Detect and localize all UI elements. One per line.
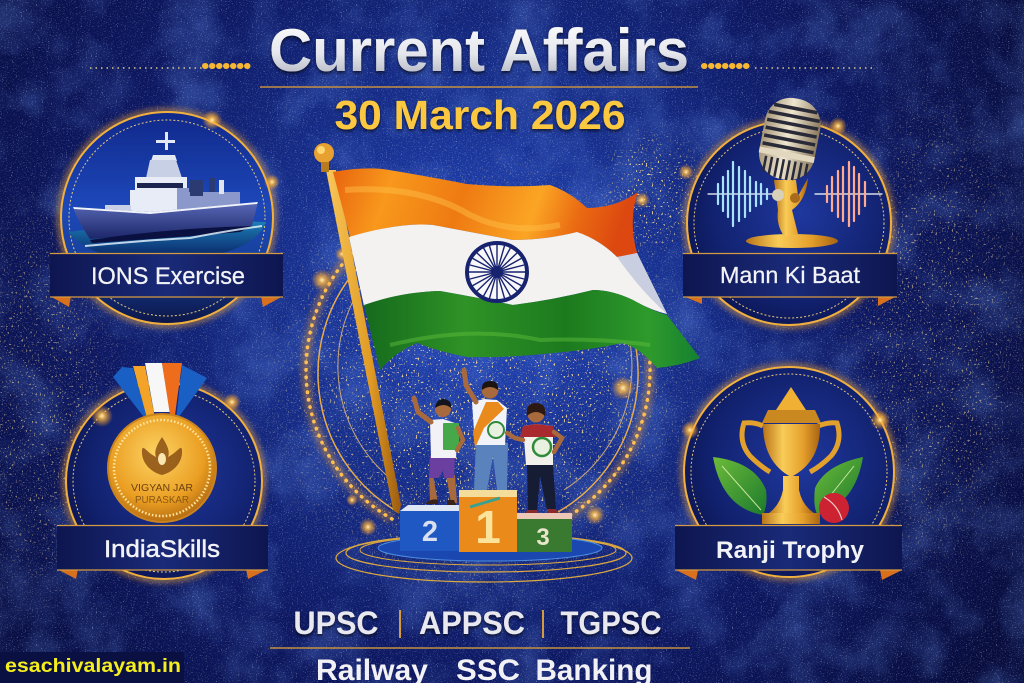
figure right	[507, 403, 562, 516]
date: 30 March 2026	[334, 92, 626, 138]
panel: Mann Ki Baat	[683, 93, 897, 326]
figure centre	[464, 370, 508, 490]
platform rings	[336, 534, 632, 582]
step 1	[459, 490, 517, 553]
ring	[686, 120, 892, 326]
icon: medal: VIGYAN JAR	[131, 482, 193, 494]
step 2: 2	[422, 516, 438, 548]
banner: IndiaSkills	[104, 536, 220, 563]
banner: IONS Exercise	[91, 263, 245, 290]
step 1: 1	[475, 501, 501, 553]
ring	[683, 366, 895, 578]
panel: Ranji Trophy	[675, 366, 902, 580]
exam names row: APPSC	[419, 605, 525, 641]
panel: IndiaSkills	[57, 363, 268, 580]
icon: ship	[68, 132, 266, 255]
website label	[0, 652, 184, 683]
title dotted ornaments	[90, 66, 875, 87]
banner	[50, 253, 283, 307]
green band	[364, 290, 700, 370]
exam names row 2	[316, 654, 652, 683]
step 2	[400, 505, 459, 551]
exam names row: TGPSC	[560, 605, 662, 641]
icon: trophy	[742, 387, 839, 524]
panel: IONS Exercise	[50, 111, 283, 325]
icon: ashoka chakra	[467, 243, 527, 301]
icon: microphone	[746, 93, 838, 248]
saffron band	[333, 168, 638, 257]
title: Current Affairs	[269, 17, 689, 84]
central golden ring	[306, 198, 650, 519]
icon: sound waves	[708, 162, 882, 226]
icon: medal: PURASKAR	[135, 494, 189, 506]
banner	[683, 253, 897, 306]
exam names row	[270, 605, 690, 648]
website label: esachivalayam.in	[5, 656, 181, 677]
icon: cricket ball	[819, 493, 849, 523]
ring	[65, 382, 263, 580]
flag pole	[314, 143, 401, 514]
podium	[336, 370, 632, 582]
banner: Ranji Trophy	[716, 537, 865, 564]
flag	[333, 168, 700, 370]
step 3: 3	[536, 524, 550, 551]
banner	[57, 525, 268, 579]
white band	[349, 224, 667, 314]
step 3	[517, 513, 572, 552]
ring	[60, 111, 274, 325]
flag folds	[345, 189, 650, 345]
icon: leaves	[713, 457, 863, 515]
banner	[675, 525, 902, 580]
banner: Mann Ki Baat	[720, 262, 861, 288]
exam names row: UPSC	[294, 605, 378, 641]
icon: medal	[108, 363, 216, 522]
ring sparkles	[91, 110, 890, 536]
figure left	[414, 398, 463, 505]
